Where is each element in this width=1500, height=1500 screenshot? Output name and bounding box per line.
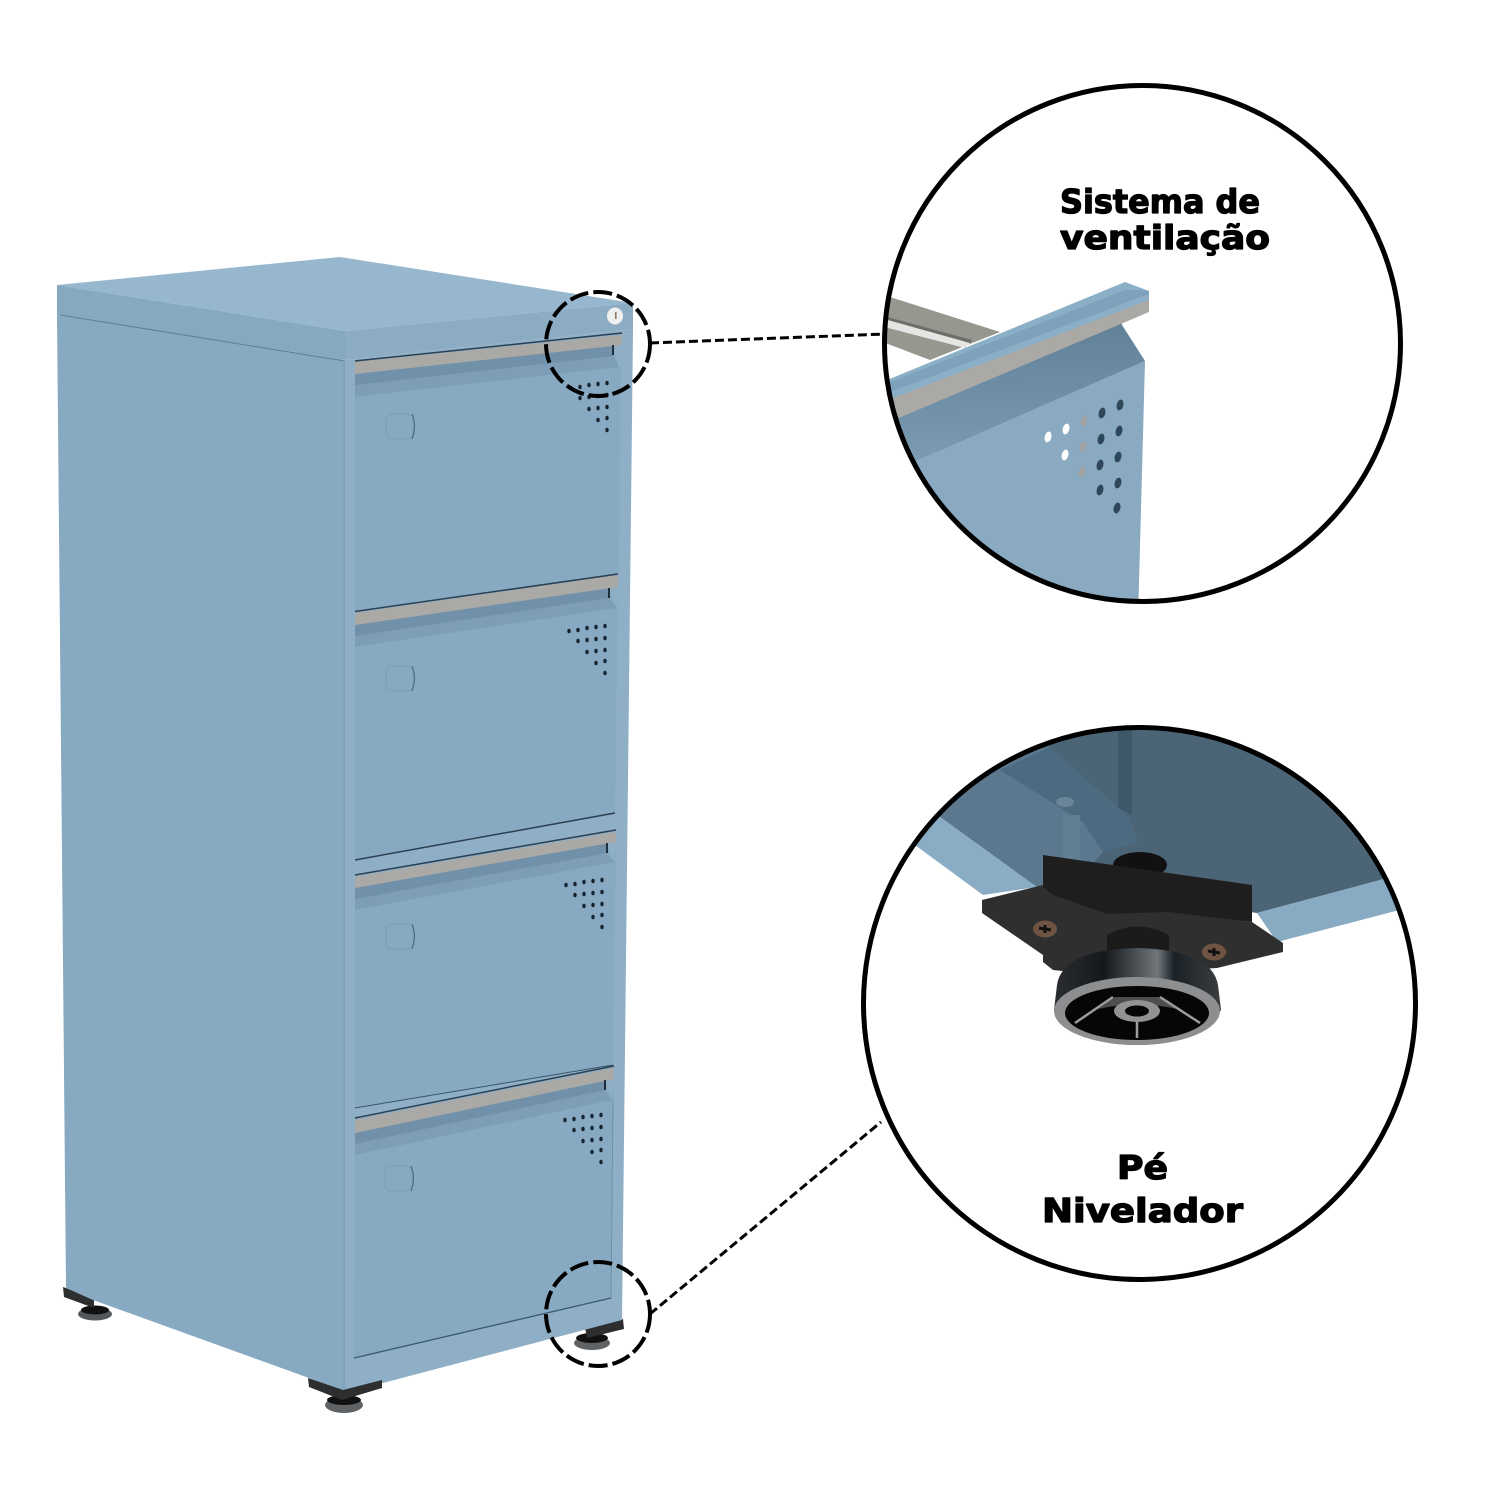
drawer 3: [355, 830, 616, 1108]
dashed connector to ventilation circle: [650, 334, 885, 343]
screws: [1033, 920, 1226, 960]
panel: levelling foot detail circle: [864, 700, 1430, 1280]
light bands: [916, 817, 1036, 895]
heading: Pé Nivelador: Pé: [1117, 1148, 1168, 1187]
foot base: [1054, 948, 1221, 1045]
cabinet feet back: [63, 1287, 624, 1350]
heading: Sistema de ventilação: Sistema de: [1060, 182, 1260, 221]
heading: Pé Nivelador: [1042, 1148, 1244, 1230]
dashed callout marker: lock area: [546, 292, 650, 396]
dashed callout marker: foot area: [546, 1262, 650, 1366]
cabinet front frame: [345, 329, 633, 1393]
drawer 1: [355, 333, 622, 611]
cabinet top front strip: [345, 303, 633, 360]
drawer 2: [355, 574, 618, 860]
heading: Sistema de ventilação: [1060, 182, 1270, 257]
ventilation drawer close-up: [880, 282, 1149, 620]
cabinet top: [57, 257, 633, 331]
cabinet top edge: [57, 285, 345, 360]
heading: Pé Nivelador: Nivelador: [1042, 1191, 1244, 1230]
cabinet feet front: [308, 1378, 382, 1413]
dashed connector to foot circle: [650, 1122, 881, 1314]
plate: [1113, 852, 1167, 872]
heading: Sistema de ventilação: ventilação: [1060, 218, 1270, 257]
ventilation holes: [1043, 399, 1125, 514]
drawer 4: [354, 1066, 614, 1358]
cabinet side panel: [57, 315, 345, 1393]
underside: [940, 730, 1383, 913]
cabinet illustration: [57, 257, 633, 1413]
icon: lock: [607, 308, 623, 324]
panel: ventilation detail circle: [880, 86, 1400, 620]
levelling foot close-up: [916, 730, 1397, 1045]
